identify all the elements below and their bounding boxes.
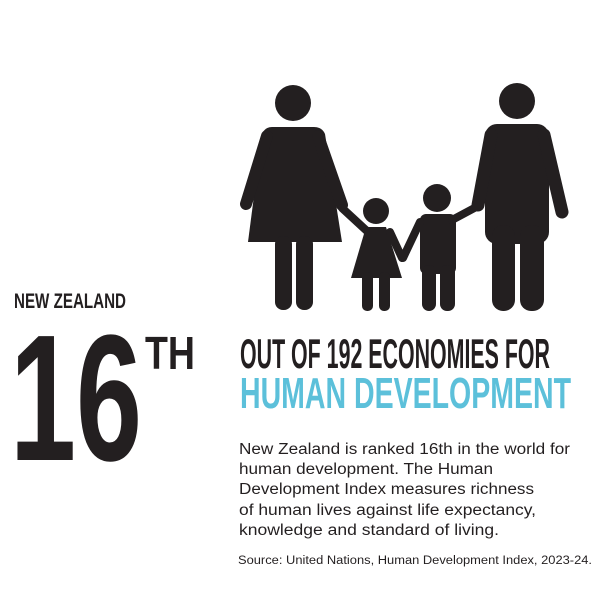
source note: Source: United Nations, Human Development Index, 2023-24.: [238, 555, 592, 567]
label: New Zealand: NEW ZEALAND: [14, 290, 126, 313]
big number: 16th: TH: [145, 327, 195, 379]
text block: description: [239, 441, 570, 539]
text block: description: New Zealand is ranked 16th in the world for: [239, 441, 570, 458]
icon: man: [478, 83, 562, 311]
icon: boy: [403, 184, 480, 311]
big number: 16th: 16: [10, 298, 142, 499]
icon: girl: [351, 198, 402, 311]
text block: description: of human lives against life expectancy,: [239, 502, 536, 519]
icon: woman: [246, 85, 368, 310]
text block: description: knowledge and standard of living.: [239, 522, 499, 539]
icon: family: [246, 83, 562, 311]
text block: description: Development Index measures richness: [239, 481, 534, 498]
heading: [240, 330, 571, 418]
text block: description: human development. The Human: [239, 461, 493, 478]
